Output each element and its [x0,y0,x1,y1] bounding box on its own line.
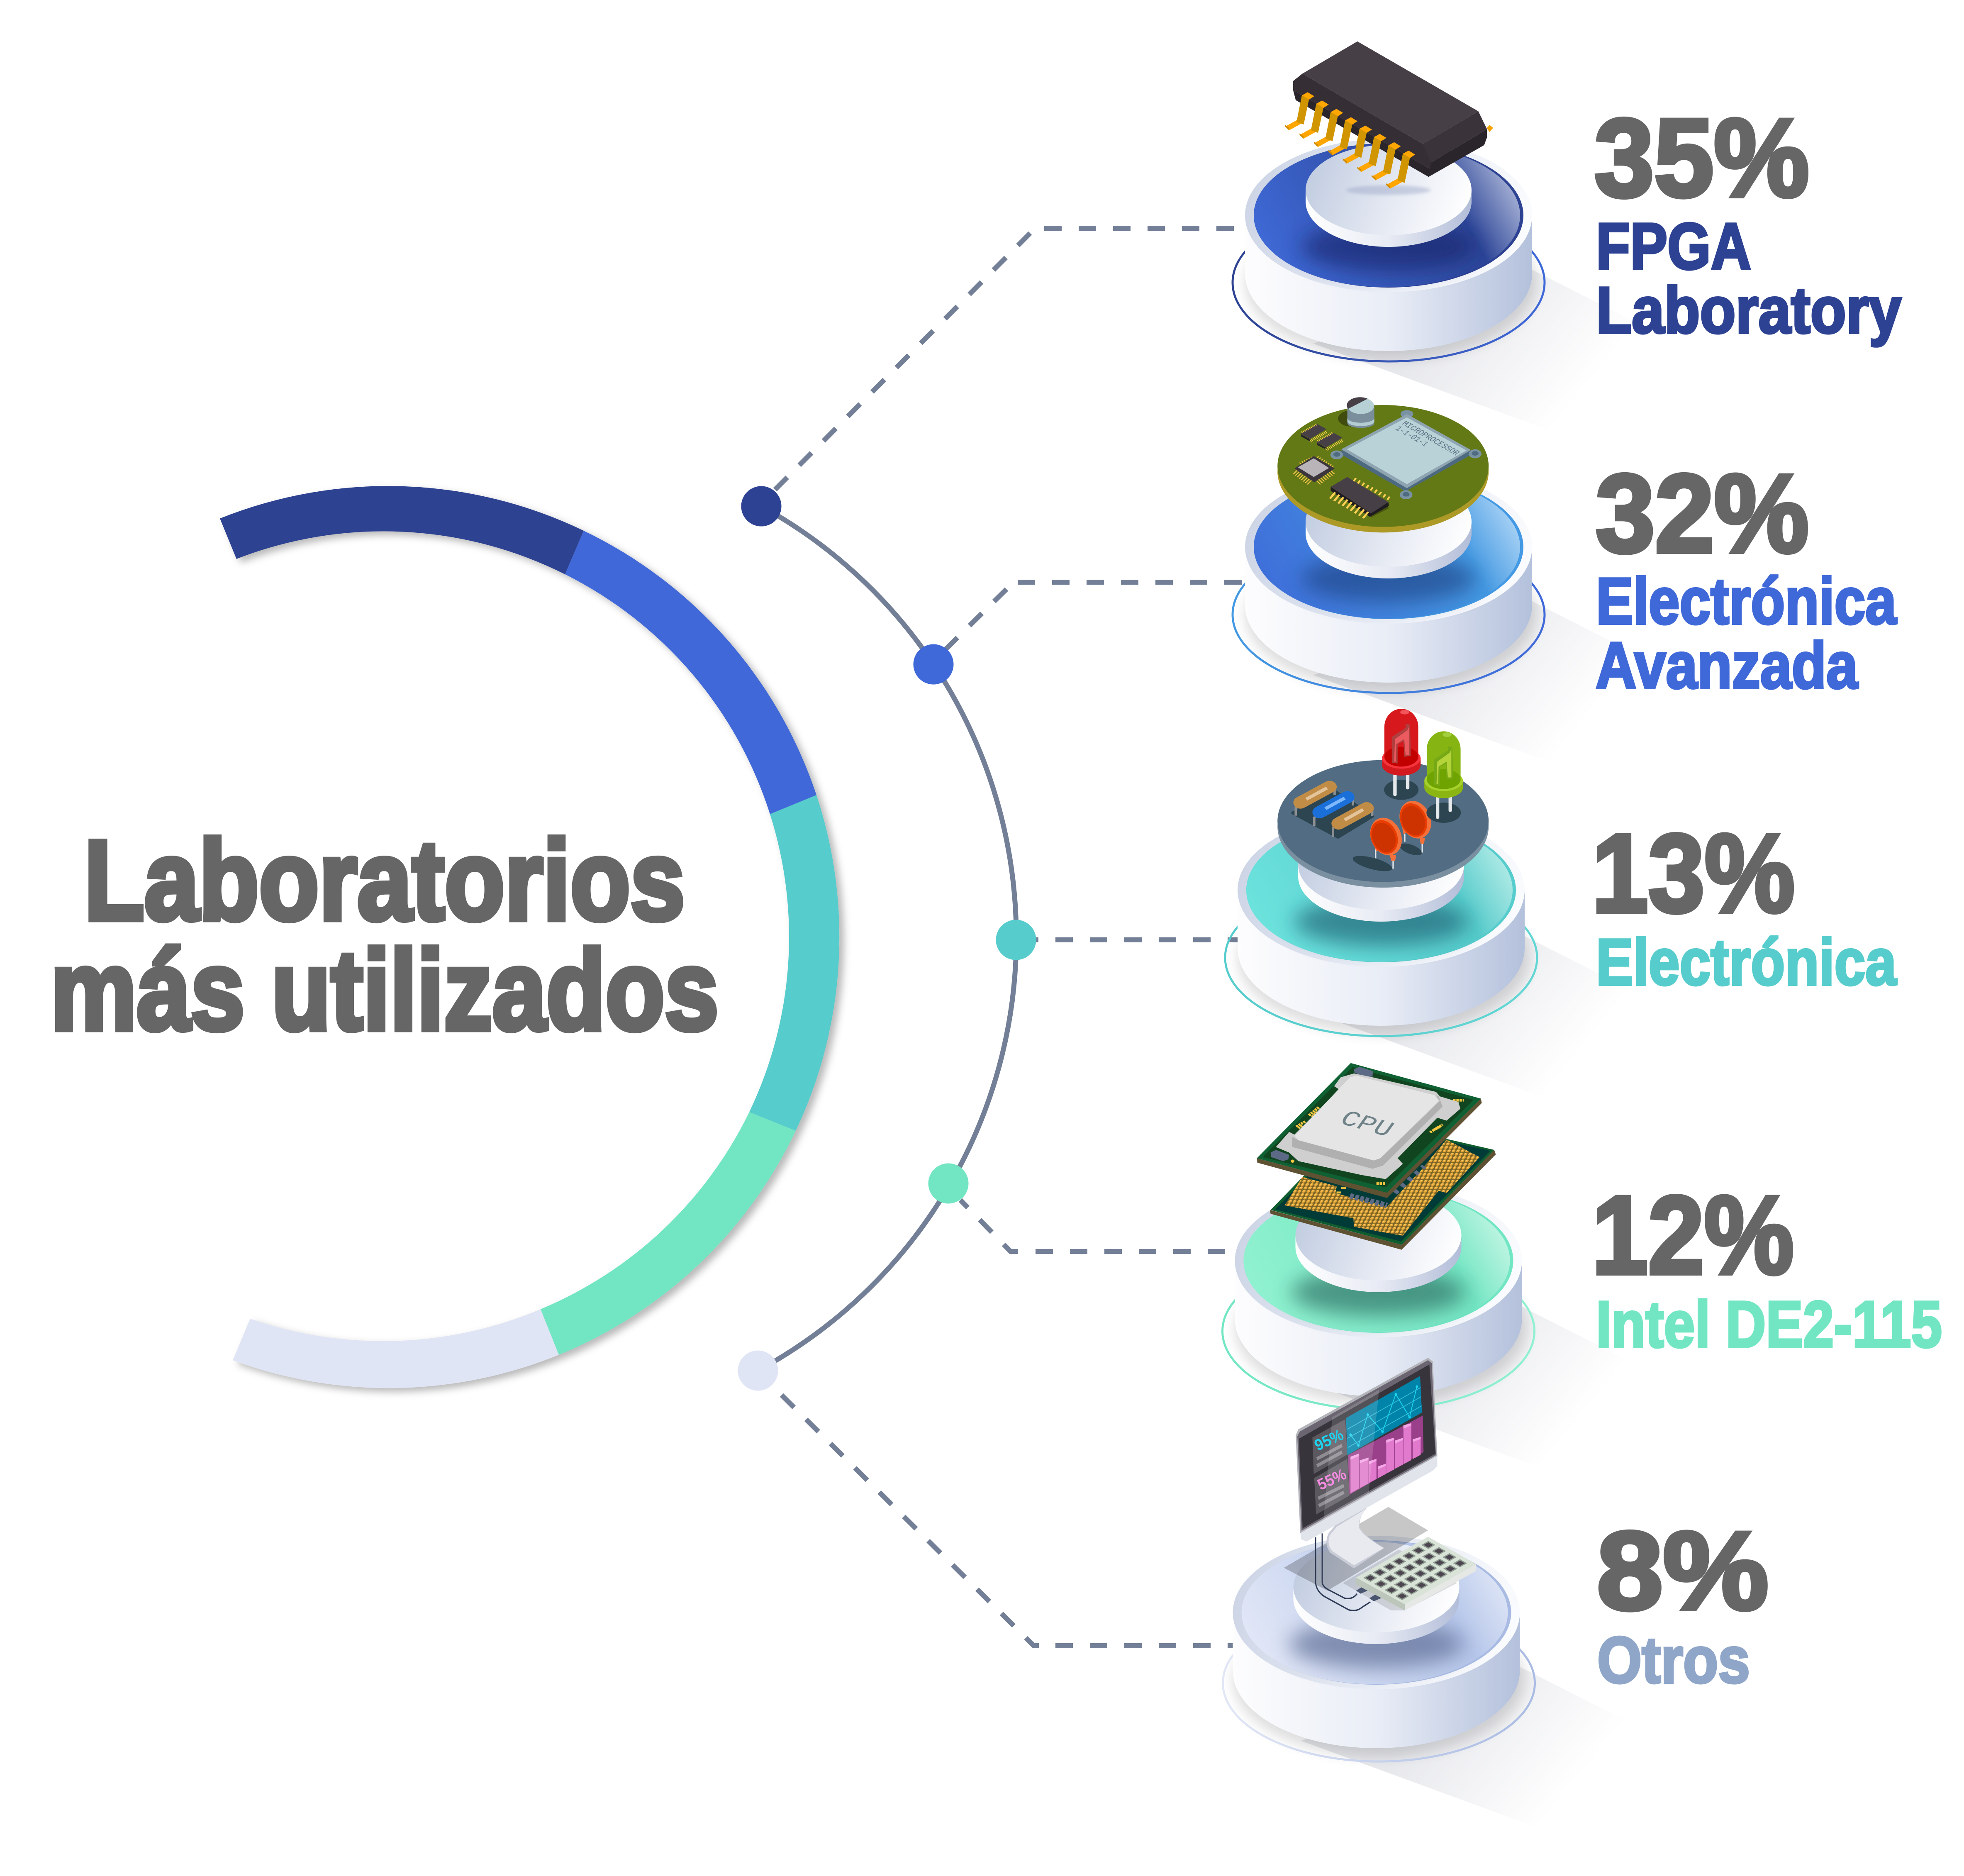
dashed connectors [775,228,1243,1646]
panel: FPGA platform [1233,41,1675,444]
ring segment: FPGA Laboratory [220,486,584,574]
ring segment: Intel DE2-115 [541,1112,796,1355]
icon: circuit board with microprocessor [1277,397,1489,532]
node: Electrónica Avanzada [914,644,953,685]
stat: 35% FPGA Laboratory [1594,95,1901,347]
stat: 32% Electrónica Avanzada [1596,451,1897,702]
node: FPGA [741,486,782,526]
icon: integrated circuit chip [1285,41,1493,195]
platform base: bright blue [1233,470,1675,776]
panel: Electrónica platform [1225,709,1667,1111]
stat: 35% FPGA Laboratory: FPGA [1596,210,1751,283]
stat: 13% Electrónica: Electrónica [1596,926,1897,999]
panel: Otros platform [1223,1358,1663,1842]
label: 95% on screen: 95% [1312,1426,1346,1454]
connector: curved arc [758,506,1016,1371]
platform base: mint [1222,1184,1664,1481]
stat: 35% FPGA Laboratory: 35% [1594,95,1809,220]
stat: 13% Electrónica [1592,811,1897,999]
node: Electrónica [996,920,1036,960]
ring segment: Electrónica Avanzada [565,531,816,814]
ring segment: Otros [233,1309,559,1388]
stat: 8% Otros [1597,1508,1769,1697]
stat: 8% Otros: 8% [1597,1508,1769,1633]
title: Laboratorios [84,817,685,944]
title [51,817,719,1054]
icon: CPU processor [1257,1063,1496,1250]
dashed line to Electrónica [1036,937,1240,942]
icon: board with LEDs, resistors and capacitors [1277,709,1489,888]
dashed line to Intel DE2-115 [960,1200,1236,1251]
stat: 12% Intel DE2-115 [1592,1173,1942,1361]
dashed line to Electrónica Avanzada [945,582,1243,650]
label: CPU: CPU [1334,1107,1399,1143]
ring segment: Electrónica [749,795,839,1131]
label: microprocessor [1393,420,1462,457]
node: Otros [738,1350,778,1391]
dashed line to FPGA [775,228,1236,490]
dashed line to Otros [782,1395,1236,1646]
stat: 12% Intel DE2-115: 12% [1592,1173,1794,1297]
platform base: teal [1225,813,1667,1111]
label: 55% on screen: 55% [1315,1466,1349,1494]
connector nodes [738,486,1036,1391]
platform base: periwinkle [1223,1536,1663,1842]
stat: 35% FPGA Laboratory: Laboratory [1596,274,1901,347]
chart: segmented ring [220,486,839,1388]
label: microprocessor: 1-1-01-1 [1393,425,1430,448]
title: más utilizados [51,927,719,1054]
stat: 8% Otros: Otros [1597,1624,1750,1697]
panel: Electrónica Avanzada platform [1233,397,1675,776]
platform base: blue [1233,139,1675,444]
stat: 13% Electrónica: 13% [1592,811,1795,935]
node: Intel DE2-115 [928,1164,968,1203]
stat: 32% Electrónica Avanzada: Electrónica [1596,565,1897,638]
label: microprocessor: MICROPROCESSOR [1399,420,1462,457]
panel: Intel DE2-115 platform [1222,1063,1664,1481]
stat: 32% Electrónica Avanzada: 32% [1596,451,1809,576]
stat: 32% Electrónica Avanzada: Avanzada [1596,629,1858,702]
icon: desktop monitor and keyboard [1284,1358,1476,1610]
